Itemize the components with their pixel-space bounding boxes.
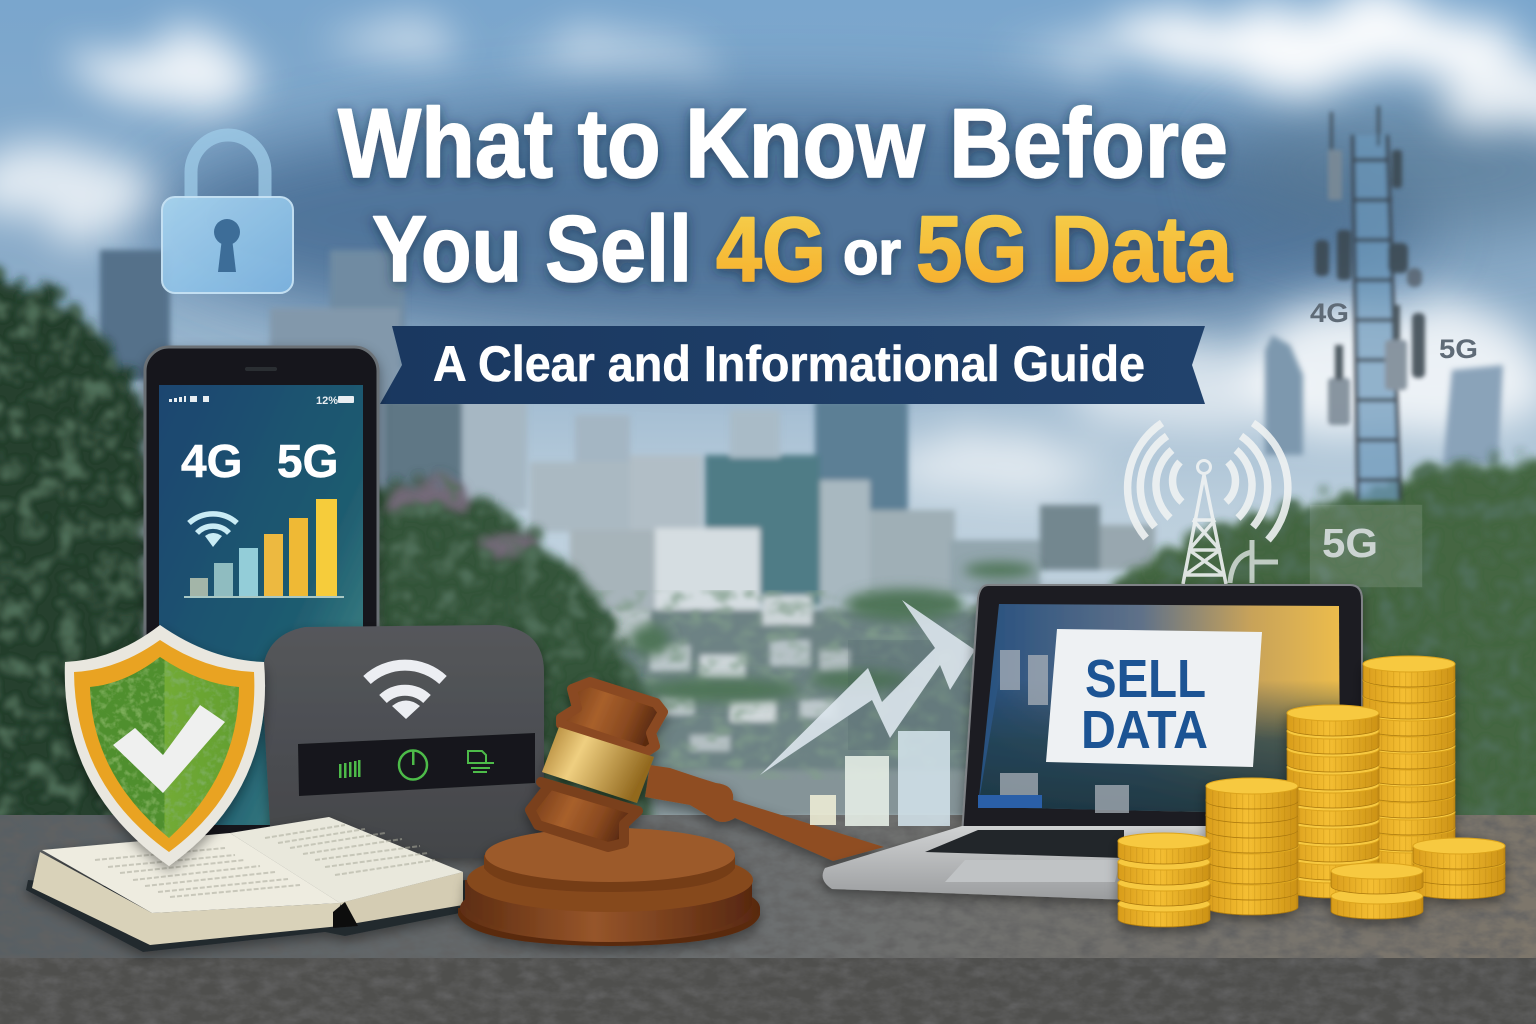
background: soft mid-distance trees: [630, 562, 1036, 702]
phone wifi icon: [189, 514, 237, 547]
callout: translucent 5G tile: 5G: [1322, 520, 1378, 566]
background: blurred city skyline: [100, 250, 1503, 818]
gavel handle: [645, 765, 884, 861]
open book: [26, 817, 465, 952]
subtitle banner: [380, 326, 1205, 404]
sell data card: [1046, 629, 1262, 767]
concrete ledge: [0, 815, 1536, 1024]
title: You Sell: [372, 196, 692, 301]
phone network label 4G: 4G: [181, 435, 242, 487]
phone status bar: 12%: [316, 395, 338, 407]
icon: translucent signal tower: [1128, 423, 1288, 584]
laptop: [823, 585, 1380, 900]
title: 5G Data: [916, 196, 1233, 301]
label: 5G beside tower: 5G: [1439, 334, 1478, 364]
phone status bar: [169, 395, 354, 407]
router wifi icon: [367, 665, 443, 719]
sell data card: DATA: [1081, 700, 1208, 760]
shield with check: [65, 625, 265, 866]
router hotspot: [262, 625, 544, 858]
background: cell tower: [1315, 106, 1425, 500]
phone signal bars: [184, 499, 344, 598]
title: [338, 88, 1233, 301]
background: town greenery texture: [590, 590, 1010, 780]
growth arrow and bars: [760, 600, 975, 826]
callout: translucent 5G tile: [1310, 505, 1422, 587]
sell data card: SELL: [1085, 649, 1206, 709]
laptop keyboard base: [823, 826, 1380, 900]
phone: [145, 347, 378, 837]
subtitle banner: A Clear and Informational Guide: [433, 336, 1145, 392]
title: What to Know Before: [338, 88, 1228, 198]
gavel: [458, 682, 884, 946]
gavel sound block: [458, 828, 760, 946]
background: trees left and right: [0, 271, 1536, 900]
title: 4G: [716, 199, 826, 301]
label: 4G beside tower: 4G: [1310, 298, 1349, 328]
gavel head: [530, 682, 663, 847]
gold coin stacks: [1118, 656, 1505, 927]
phone network label 5G: 5G: [277, 435, 338, 487]
title: or: [843, 219, 901, 288]
router status panel: [298, 733, 535, 796]
icon: padlock: [162, 135, 293, 293]
